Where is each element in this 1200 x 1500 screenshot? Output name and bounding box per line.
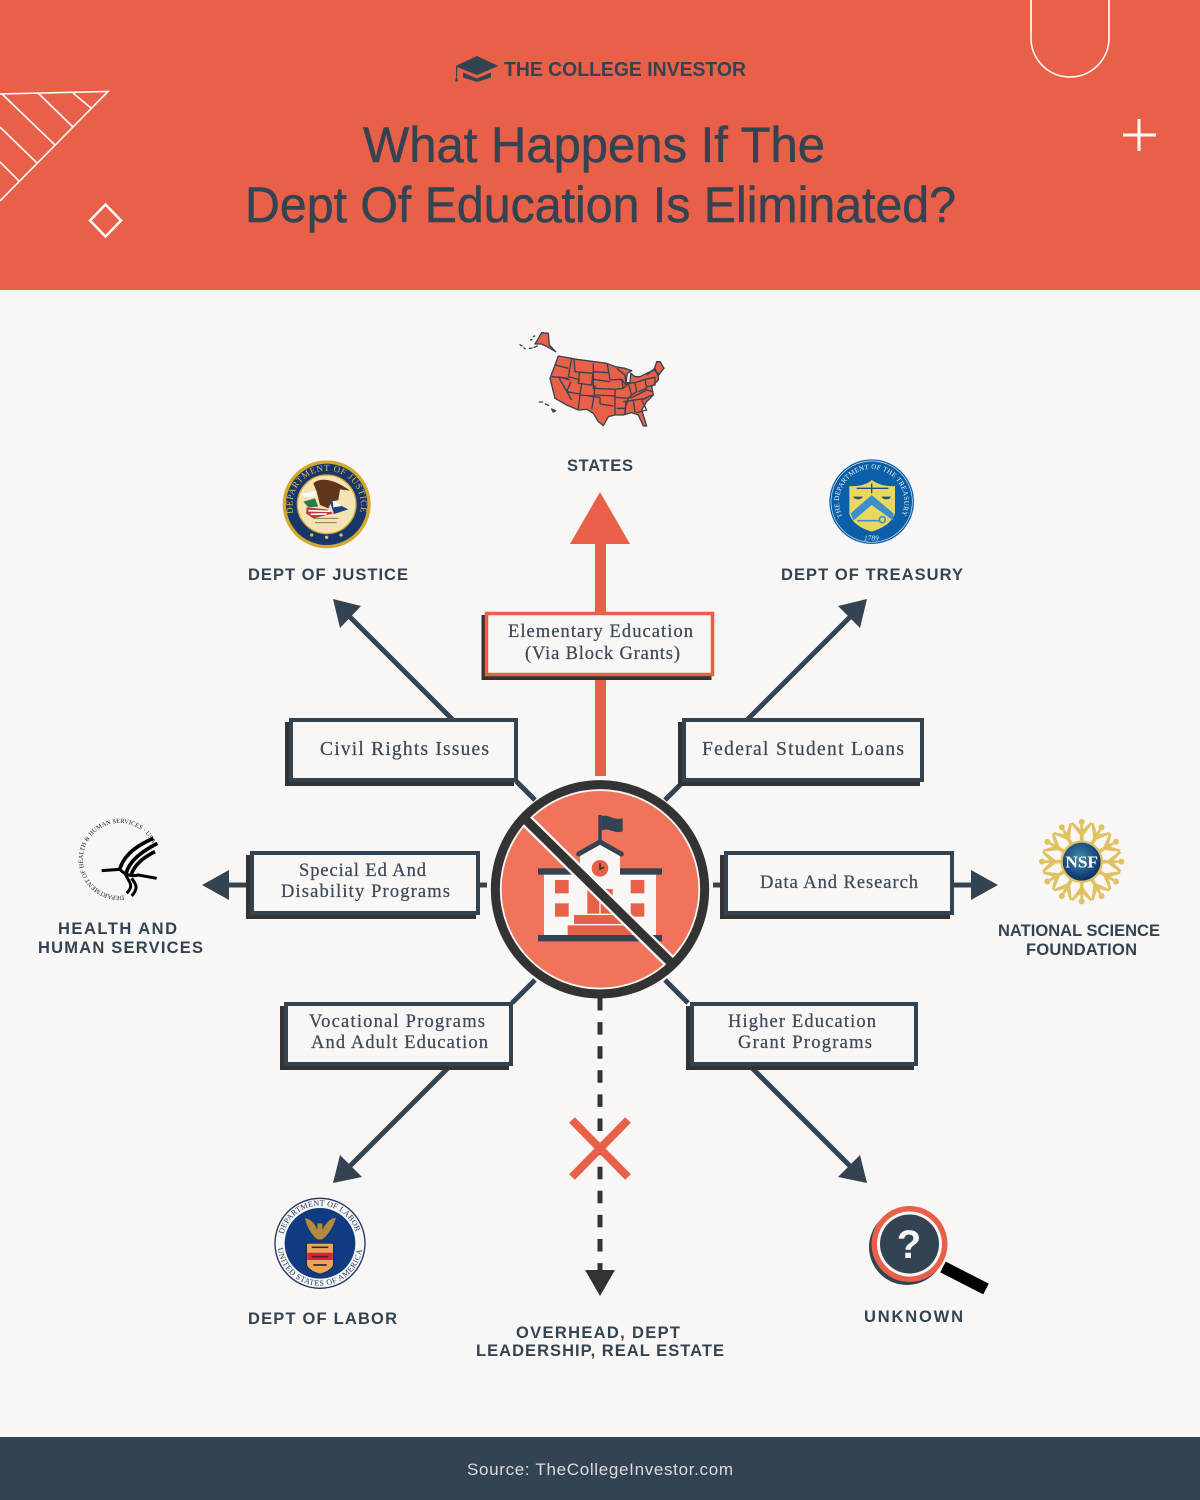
label: overhead: LEADERSHIP, REAL ESTATE bbox=[476, 1342, 724, 1360]
box: higher education: Higher Education bbox=[728, 1012, 876, 1032]
logo: national science foundation bbox=[1039, 819, 1124, 904]
icon: magnifying glass with question mark bbox=[869, 1206, 986, 1289]
dashed arrow: to overhead bbox=[585, 998, 615, 1296]
label: national science foundation bbox=[998, 922, 1160, 959]
arrow: to unknown bbox=[751, 1067, 867, 1183]
logo: health and human services bbox=[78, 818, 158, 900]
box: vocational programs: And Adult Education bbox=[311, 1033, 488, 1053]
logo wordmark: THE COLLEGE INVESTOR bbox=[504, 58, 746, 81]
seal: dept of treasury bbox=[829, 459, 914, 544]
label: overhead: OVERHEAD, DEPT bbox=[516, 1324, 680, 1342]
icon: red x bbox=[572, 1120, 628, 1177]
seal text: DEPARTMENT OF JUSTICE bbox=[286, 464, 367, 514]
decoration: plus bbox=[1123, 119, 1156, 151]
box: higher education: Grant Programs bbox=[738, 1033, 872, 1053]
seal: dept of labor bbox=[274, 1198, 366, 1289]
seal text: DEPARTMENT OF LABOR bbox=[278, 1200, 360, 1234]
box: special ed: Special Ed And bbox=[299, 861, 427, 881]
icon: magnifying glass with question mark: ? bbox=[897, 1223, 921, 1267]
logo bbox=[455, 56, 746, 82]
center: prohibited school icon bbox=[495, 785, 705, 994]
title: Dept Of Education Is Eliminated? bbox=[245, 177, 956, 233]
box: vocational programs: Vocational Programs bbox=[309, 1012, 485, 1032]
arrow: to dept of treasury bbox=[747, 599, 867, 720]
seal text: DEPARTMENT OF HEALTH & HUMAN SERVICES · USA bbox=[78, 818, 156, 900]
label: dept of justice: DEPT OF JUSTICE bbox=[248, 566, 408, 584]
box: elementary education: Elementary Education bbox=[508, 622, 693, 642]
label: health and human services: HEALTH AND bbox=[58, 920, 177, 938]
arrow: to health and human services bbox=[202, 870, 250, 900]
header banner bbox=[0, 0, 1200, 290]
label: health and human services: HUMAN SERVICES bbox=[38, 939, 203, 957]
box: federal student loans bbox=[678, 720, 922, 786]
footer bbox=[0, 1437, 1200, 1500]
footer: Source: TheCollegeInvestor.com bbox=[467, 1460, 733, 1479]
arrow: to national science foundation bbox=[950, 870, 998, 900]
label: national science foundation: FOUNDATION bbox=[1026, 941, 1137, 959]
label: dept of labor: DEPT OF LABOR bbox=[248, 1310, 397, 1328]
seal: dept of justice bbox=[282, 460, 371, 548]
seal text: THE DEPARTMENT OF THE TREASURY bbox=[834, 464, 909, 518]
label: health and human services bbox=[38, 920, 203, 957]
label: states: STATES bbox=[567, 457, 633, 475]
box: data and research bbox=[720, 853, 952, 919]
seal text: UNITED STATES OF AMERICA bbox=[278, 1247, 362, 1286]
box: higher education bbox=[686, 1004, 916, 1070]
box: civil rights issues: Civil Rights Issues bbox=[320, 739, 489, 760]
connector lines from center bbox=[479, 781, 721, 1003]
decoration: hatched triangle bbox=[0, 92, 108, 201]
icon: school building bbox=[538, 815, 662, 941]
box: special ed: Disability Programs bbox=[281, 882, 450, 902]
box: civil rights issues bbox=[285, 720, 516, 786]
label: overhead bbox=[476, 1324, 724, 1360]
box: elementary education: (Via Block Grants) bbox=[525, 644, 680, 664]
label: unknown: UNKNOWN bbox=[864, 1308, 963, 1326]
box: federal student loans: Federal Student Loans bbox=[702, 739, 904, 760]
arrow: to dept of labor bbox=[333, 1067, 449, 1183]
icon: graduation cap bbox=[455, 56, 498, 82]
icon: eagle bbox=[102, 838, 157, 896]
icon: us map bbox=[520, 333, 664, 426]
arrow: to states bbox=[570, 492, 630, 776]
title bbox=[245, 117, 956, 233]
box: special ed bbox=[246, 853, 478, 919]
title: What Happens If The bbox=[363, 117, 825, 173]
label: dept of treasury: DEPT OF TREASURY bbox=[781, 566, 963, 584]
label: national science foundation: NATIONAL SCIENCE bbox=[998, 922, 1160, 940]
logo: national science foundation: NSF bbox=[1065, 852, 1098, 871]
decoration: arch bbox=[1031, 0, 1109, 77]
box: data and research: Data And Research bbox=[760, 873, 918, 893]
box: vocational programs bbox=[280, 1004, 511, 1070]
decoration: diamond bbox=[90, 204, 121, 236]
seal: dept of treasury: 1789 bbox=[864, 534, 879, 543]
box: elementary education bbox=[482, 614, 712, 680]
arrow: to dept of justice bbox=[333, 599, 453, 720]
